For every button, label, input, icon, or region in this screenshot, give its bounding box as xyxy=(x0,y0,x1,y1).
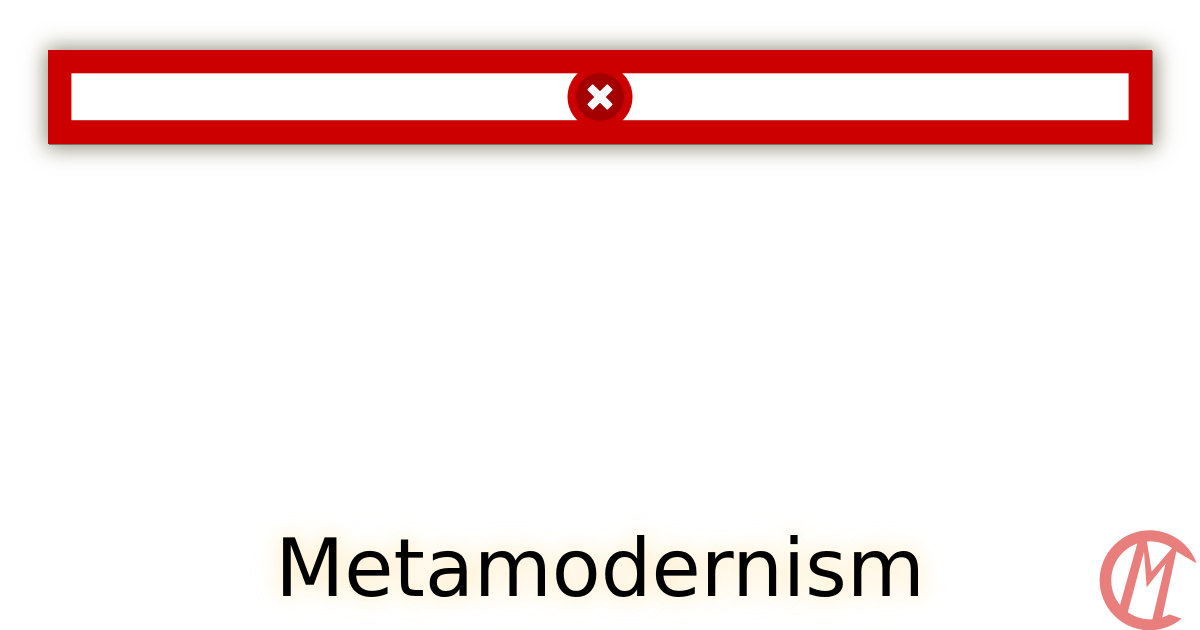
icon: error cross badge xyxy=(568,73,632,121)
panel: red framed bar xyxy=(48,50,1152,144)
white inner bar xyxy=(71,73,1129,120)
title: Metamodernism xyxy=(275,522,925,615)
